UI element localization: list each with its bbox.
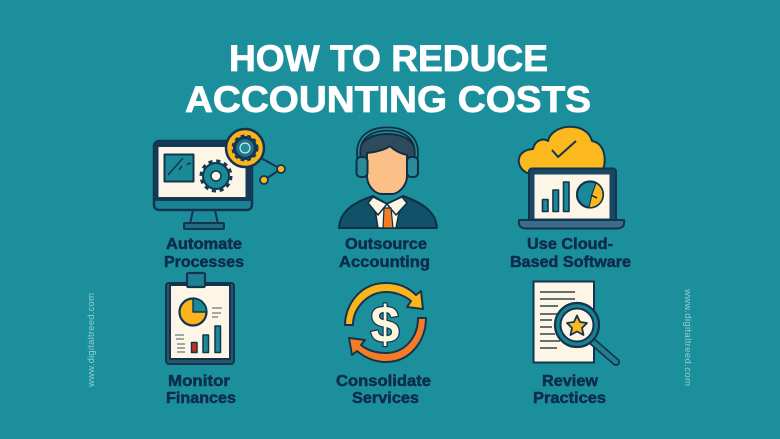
watermark right: www.digitaltreed.com — [682, 288, 693, 386]
label: Outsource — [345, 236, 427, 253]
icon: document with magnifier — [534, 282, 616, 362]
label — [336, 373, 431, 407]
icon: clipboard report — [166, 273, 234, 364]
title: ACCOUNTING COSTS — [185, 79, 591, 120]
label: Processes — [164, 254, 244, 271]
label — [339, 236, 430, 271]
label — [166, 373, 236, 407]
label: Review — [542, 373, 599, 390]
label: Accounting — [339, 254, 430, 271]
label: Based Software — [510, 254, 631, 271]
item: review practices — [533, 282, 616, 407]
label: Automate — [166, 236, 242, 253]
item: monitor finances — [166, 273, 236, 407]
label: Consolidate — [336, 373, 431, 390]
label — [533, 373, 606, 407]
label: Finances — [166, 390, 236, 407]
icon: cloud and laptop — [519, 127, 624, 228]
label: Services — [352, 390, 419, 407]
label: Monitor — [168, 373, 230, 390]
item: automate processes — [154, 129, 285, 271]
icon: monitor with gears — [154, 129, 285, 229]
item: use cloud-based software — [510, 127, 631, 271]
item: consolidate services — [336, 283, 431, 407]
icon: person with headset — [339, 129, 437, 228]
icon: dollar with circular arrows: $ — [371, 296, 400, 354]
watermark left: www.digitaltreed.com — [86, 293, 97, 388]
title — [185, 38, 591, 120]
label: Use Cloud- — [527, 236, 613, 253]
title: HOW TO REDUCE — [229, 38, 548, 79]
label: Practices — [533, 390, 606, 407]
label — [510, 236, 631, 271]
item: outsource accounting — [339, 129, 437, 271]
label — [164, 236, 244, 271]
